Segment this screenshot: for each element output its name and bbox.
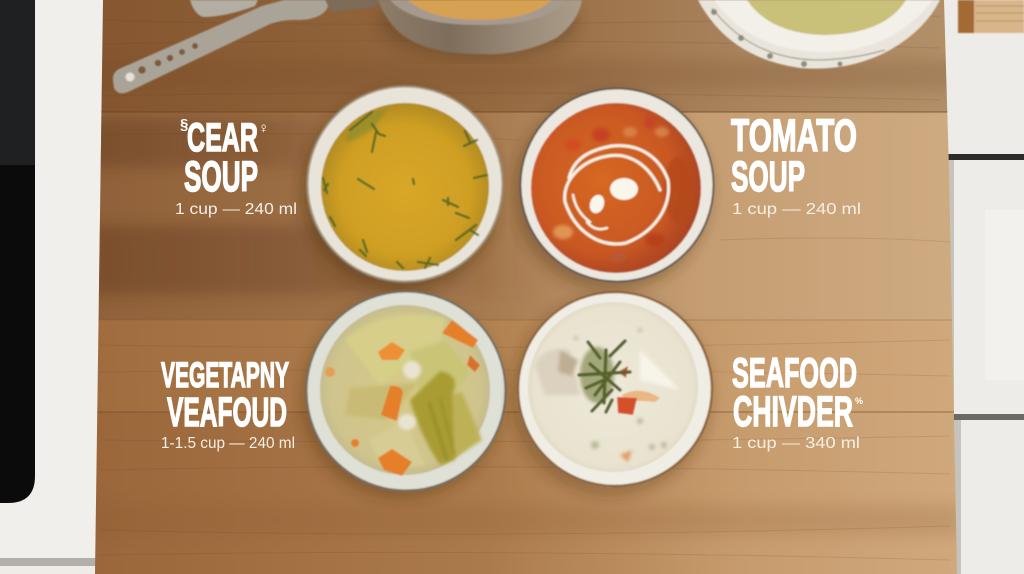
- left white cabinet panel: [0, 0, 110, 574]
- wooden block in top right corner: [958, 0, 1024, 33]
- bowl: vegetable soup: [301, 291, 506, 499]
- label: clear soup: 1 cup — 240 ml: [175, 201, 297, 218]
- label: vegetable soup: VEAFOUD: [167, 389, 287, 435]
- label: vegetable soup: [161, 356, 295, 452]
- label: vegetable soup: 1-1.5 cup — 240 ml: [161, 435, 295, 452]
- label: tomato soup: SOUP: [731, 153, 805, 201]
- label: seafood chowder: %: [855, 396, 863, 406]
- label: seafood chowder: SEAFOOD: [732, 349, 857, 396]
- patterned white bowl, top right: [698, 0, 940, 69]
- label: seafood chowder: 1 cup — 340 ml: [732, 435, 860, 452]
- label: tomato soup: [731, 110, 861, 218]
- bowl: seafood chowder: [511, 291, 713, 496]
- label: tomato soup: 1 cup — 240 ml: [732, 201, 861, 218]
- metal pot with soup, top centre: [378, 0, 582, 60]
- label: tomato soup: TOMATO: [731, 110, 857, 161]
- label: clear soup: [175, 116, 297, 218]
- label: clear soup: SOUP: [184, 153, 258, 201]
- label: clear soup: CEAR: [187, 116, 258, 160]
- right white tiles: [940, 0, 1024, 574]
- bowl: clear soup: [301, 86, 503, 291]
- label: seafood chowder: [732, 349, 863, 452]
- bowl: tomato soup: [513, 88, 714, 291]
- label: clear soup: §: [180, 116, 188, 133]
- slotted metal spoon: [113, 0, 378, 93]
- label: clear soup: ♀: [258, 120, 269, 137]
- label: vegetable soup: VEGETAPNY: [161, 356, 289, 395]
- label: seafood chowder: CHIVDER: [733, 388, 853, 436]
